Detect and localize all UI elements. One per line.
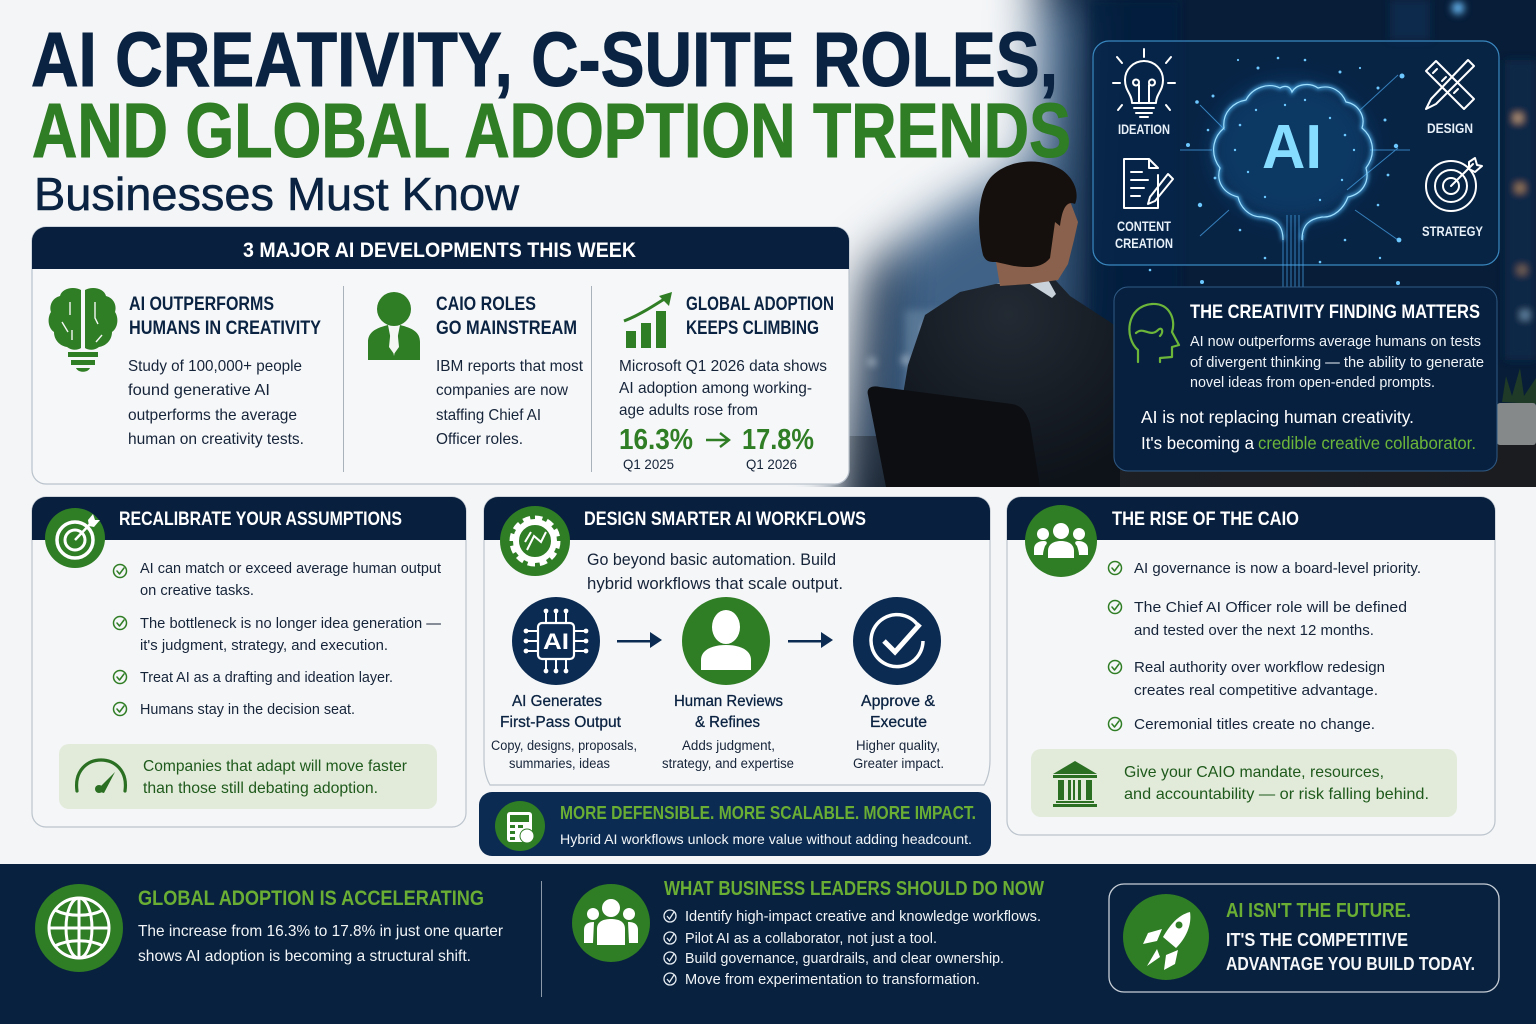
leaders checklist: Build governance, guardrails, and clear ownership. xyxy=(685,950,1004,967)
title: Businesses Must Know xyxy=(34,168,520,220)
stat: adoption rise: 17.8% xyxy=(742,424,814,456)
checklist: AI governance is now a board-level priority. xyxy=(1134,560,1421,577)
checklist: creates real competitive advantage. xyxy=(1134,682,1378,699)
banner text: Hybrid AI workflows unlock more value without adding headcount. xyxy=(560,831,972,847)
person: hair xyxy=(979,161,1077,267)
person: neck and face xyxy=(996,196,1078,286)
title xyxy=(31,17,1071,220)
column 1 text xyxy=(128,294,321,448)
person: suit xyxy=(897,272,1120,487)
panel header xyxy=(32,227,849,269)
intro text xyxy=(587,550,843,593)
panel: the rise of the CAIO xyxy=(1007,497,1495,835)
column 2 text: CAIO ROLES xyxy=(436,294,536,315)
step 3: approve and execute: Approve & xyxy=(861,693,935,710)
body text xyxy=(1190,333,1484,391)
panel heading: DESIGN SMARTER AI WORKFLOWS xyxy=(584,509,866,530)
leaders checklist: Identify high-impact creative and knowledge workflows. xyxy=(685,908,1041,925)
step 3: approve and execute: Execute xyxy=(870,714,927,731)
takeaway: credible creative collaborator. xyxy=(1258,433,1476,453)
dark city background xyxy=(804,0,1536,487)
body text: of divergent thinking — the ability to generate xyxy=(1190,354,1484,371)
column 2 text xyxy=(436,294,584,448)
panel heading: RECALIBRATE YOUR ASSUMPTIONS xyxy=(119,509,402,530)
brain outline xyxy=(1214,85,1372,240)
callout: and accountability — or risk falling behind. xyxy=(1124,786,1429,803)
body text: AI now outperforms average humans on tests xyxy=(1190,333,1481,350)
AI label in brain: AI xyxy=(1262,113,1322,182)
icon: lightbulb xyxy=(1113,49,1175,117)
global adoption heading: GLOBAL ADOPTION IS ACCELERATING xyxy=(138,887,484,910)
column 3 text xyxy=(619,294,834,419)
light haze fading into page xyxy=(700,0,1079,487)
label: content creation: CONTENT xyxy=(1117,218,1171,234)
leaders checklist xyxy=(664,908,1041,988)
checklist: Ceremonial titles create no change. xyxy=(1134,716,1375,733)
icon: calculator xyxy=(495,801,545,851)
panel: 3 major AI developments xyxy=(32,227,849,484)
column 3 text: AI adoption among working- xyxy=(619,380,812,397)
callout text: AI ISN'T THE FUTURE. xyxy=(1226,900,1411,922)
brain glow xyxy=(1211,80,1371,220)
stat: adoption rise: 16.3% xyxy=(619,424,693,456)
panel heading: THE RISE OF THE CAIO xyxy=(1112,509,1299,530)
step 1: AI generates: AI Generates xyxy=(512,693,602,710)
icon: team badge xyxy=(1025,505,1097,577)
column 2 text: Officer roles. xyxy=(436,431,523,448)
panel header xyxy=(1007,497,1495,540)
body text: novel ideas from open-ended prompts. xyxy=(1190,374,1435,391)
heading: THE CREATIVITY FINDING MATTERS xyxy=(1190,302,1480,323)
person: collar xyxy=(996,281,1056,298)
step 1: AI generates: Copy, designs, proposals, xyxy=(491,738,637,753)
icon: executive xyxy=(368,292,420,360)
stat: adoption rise: Q1 2026 xyxy=(746,456,797,472)
label: ideation: IDEATION xyxy=(1118,121,1170,137)
checklist: Treat AI as a drafting and ideation layer. xyxy=(140,669,393,686)
panel: recalibrate your assumptions xyxy=(32,497,466,827)
icon: business leaders xyxy=(572,884,650,962)
callout: competitive advantage: ADVANTAGE YOU BUILD TODAY. xyxy=(1226,954,1475,974)
label: content creation: CREATION xyxy=(1115,235,1173,251)
icon: growth chart xyxy=(624,292,672,348)
checklist: on creative tasks. xyxy=(140,582,254,599)
checklist: and tested over the next 12 months. xyxy=(1134,622,1374,639)
step 1: AI generates: summaries, ideas xyxy=(509,756,610,771)
icon: rocket xyxy=(1123,894,1209,980)
checklist: The bottleneck is no longer idea generation — xyxy=(140,615,441,632)
checklist xyxy=(114,560,442,718)
hero photo: executive facing AI display xyxy=(804,0,1536,487)
column 2 text: staffing Chief AI xyxy=(436,407,541,424)
blurred city lights xyxy=(866,0,1536,390)
icon: target badge xyxy=(45,508,105,568)
panel header xyxy=(32,497,466,540)
step 3: approve and execute: Greater impact. xyxy=(853,756,944,771)
leaders checklist: Pilot AI as a collaborator, not just a tool. xyxy=(685,930,937,947)
callout: competitive advantage xyxy=(1109,884,1499,992)
banner headline: MORE DEFENSIBLE. MORE SCALABLE. MORE IMPACT. xyxy=(560,803,976,823)
callout: Give your CAIO mandate, resources, xyxy=(1124,764,1384,781)
glass AI panel xyxy=(1093,41,1499,287)
checklist: Humans stay in the decision seat. xyxy=(140,701,355,718)
icon: head outline xyxy=(1129,304,1179,362)
step 3: approve and execute xyxy=(853,597,944,771)
callout: competitive advantage: IT'S THE COMPETITIVE xyxy=(1226,930,1408,950)
callout xyxy=(59,744,437,809)
intro text: Go beyond basic automation. Build xyxy=(587,550,836,569)
arrow xyxy=(788,632,833,648)
takeaway xyxy=(1141,407,1476,453)
checklist xyxy=(1108,560,1421,733)
potted plant xyxy=(1497,368,1536,445)
icon: target xyxy=(1426,158,1482,211)
leaders heading: WHAT BUSINESS LEADERS SHOULD DO NOW xyxy=(664,878,1044,900)
column 1 text: found generative AI xyxy=(128,382,270,399)
desk xyxy=(830,436,1536,487)
column 1 text: HUMANS IN CREATIVITY xyxy=(129,318,321,339)
callout: Companies that adapt will move faster xyxy=(143,758,408,775)
global adoption text: shows AI adoption is becoming a structural shift. xyxy=(138,948,471,965)
step 2: human reviews: Adds judgment, xyxy=(682,738,775,753)
step 1: AI generates: AI xyxy=(543,629,569,654)
column 1 text: AI OUTPERFORMS xyxy=(129,294,274,315)
checklist: Real authority over workflow redesign xyxy=(1134,659,1385,676)
column 2 text: companies are now xyxy=(436,382,568,399)
step 1: AI generates xyxy=(491,597,637,771)
panel heading: 3 MAJOR AI DEVELOPMENTS THIS WEEK xyxy=(243,239,636,262)
icon: document and pen xyxy=(1124,159,1173,208)
brain outline core xyxy=(1214,85,1372,240)
column 2 text: GO MAINSTREAM xyxy=(436,318,577,339)
takeaway: It's becoming a xyxy=(1141,433,1254,453)
label: content creation xyxy=(1115,222,1172,248)
column 1 text: human on creativity tests. xyxy=(128,431,304,448)
step 2: human reviews: strategy, and expertise xyxy=(662,756,794,771)
global adoption text: The increase from 16.3% to 17.8% in just one quarter xyxy=(138,923,504,940)
callout xyxy=(1031,749,1457,817)
column 3 text: Microsoft Q1 2026 data shows xyxy=(619,358,827,375)
intro text: hybrid workflows that scale output. xyxy=(587,574,843,593)
stat: adoption rise xyxy=(619,424,814,472)
title: AI CREATIVITY, C-SUITE ROLES, xyxy=(31,17,1058,103)
callout: than those still debating adoption. xyxy=(143,780,378,797)
label: design: DESIGN xyxy=(1427,120,1473,136)
stat: adoption rise: Q1 2025 xyxy=(623,456,674,472)
bottom band xyxy=(0,864,1536,1024)
checklist: AI can match or exceed average human output xyxy=(140,560,442,577)
step 3: approve and execute: Higher quality, xyxy=(856,738,940,753)
leaders checklist: Move from experimentation to transformation. xyxy=(685,971,980,988)
step 2: human reviews: Human Reviews xyxy=(674,693,783,710)
panel header xyxy=(484,497,990,540)
column 3 text: GLOBAL ADOPTION xyxy=(686,294,834,315)
mid-tone haze xyxy=(880,0,1085,487)
arrow xyxy=(617,632,662,648)
banner: more defensible xyxy=(479,792,991,856)
column 3 text: age adults rose from xyxy=(619,402,758,419)
checklist: it's judgment, strategy, and execution. xyxy=(140,637,388,654)
icon: gear badge xyxy=(500,506,570,576)
column 3 text: KEEPS CLIMBING xyxy=(686,318,819,339)
label: strategy: STRATEGY xyxy=(1422,223,1484,239)
takeaway: AI is not replacing human creativity. xyxy=(1141,407,1414,427)
column 1 text: outperforms the average xyxy=(128,407,297,424)
network dots xyxy=(1149,57,1404,285)
step 2: human reviews: & Refines xyxy=(695,714,760,731)
circuit stem xyxy=(1180,75,1410,287)
checklist: The Chief AI Officer role will be defined xyxy=(1134,599,1407,616)
icon: brain bulb xyxy=(49,288,117,372)
panel: design smarter AI workflows xyxy=(484,497,990,785)
global adoption text xyxy=(138,923,504,965)
title: AND GLOBAL ADOPTION TRENDS xyxy=(32,88,1071,174)
column 2 text: IBM reports that most xyxy=(436,358,584,375)
icon: globe xyxy=(35,884,123,972)
step 1: AI generates: First-Pass Output xyxy=(500,714,622,731)
panel: the creativity finding matters xyxy=(1114,287,1497,471)
column 1 text: Study of 100,000+ people xyxy=(128,358,302,375)
icon: pencil and ruler xyxy=(1426,60,1474,109)
step 2: human reviews xyxy=(662,597,794,771)
office chair xyxy=(868,386,1040,487)
